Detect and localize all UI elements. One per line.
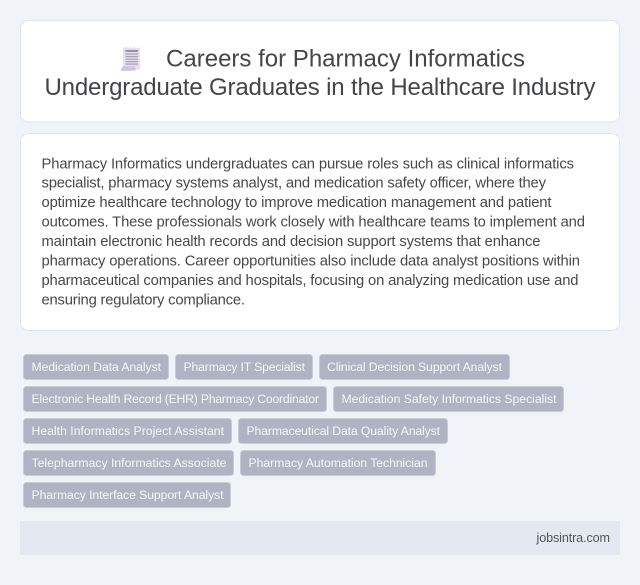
title (44, 46, 596, 101)
text block: summary paragraph: specialist, pharmacy systems analyst, and medication safety officer, where they (42, 176, 547, 192)
tag: Pharmacy Interface Support Analyst (24, 482, 230, 508)
tag: Pharmacy Automation Technician: Pharmacy Automation Technician (248, 456, 428, 470)
footer text: source: jobsintra.com (536, 531, 610, 545)
panel: header (20, 20, 620, 122)
text block: summary paragraph: pharmacy operations. Career opportunities also include data analyst positions within (42, 254, 580, 270)
tag: Clinical Decision Support Analyst (320, 354, 510, 380)
tag: Clinical Decision Support Analyst: Clinical Decision Support Analyst (327, 360, 503, 374)
text block: summary paragraph: pharmaceutical companies and hospitals, focusing on analyzing medication use and (42, 273, 578, 289)
text block: summary paragraph (42, 156, 585, 308)
text block: summary paragraph: Pharmacy Informatics undergraduates can pursue roles such as clinical informatics (42, 156, 574, 172)
tag: Electronic Health Record (EHR) Pharmacy Coordinator: Electronic Health Record (EHR) Pharmacy Coordinator (32, 392, 319, 406)
text block: summary paragraph: maintain electronic health records and decision support systems that enhance (42, 234, 540, 250)
text block: summary paragraph: outcomes. These professionals work closely with healthcare teams to implement and (42, 214, 585, 230)
tag: Pharmaceutical Data Quality Analyst (238, 418, 448, 444)
tag: Telepharmacy Informatics Associate: Telepharmacy Informatics Associate (32, 456, 227, 470)
tag: Medication Safety Informatics Specialist: Medication Safety Informatics Specialist (342, 392, 557, 406)
tag: Electronic Health Record (EHR) Pharmacy Coordinator (24, 386, 326, 412)
title: Undergraduate Graduates in the Healthcare Industry (44, 74, 596, 101)
tag: Pharmacy Automation Technician (240, 450, 436, 476)
tag: Pharmacy Interface Support Analyst: Pharmacy Interface Support Analyst (32, 488, 224, 502)
tag list: career roles (24, 354, 564, 508)
tag: Medication Data Analyst: Medication Data Analyst (32, 360, 162, 374)
tag: Health Informatics Project Assistant: Health Informatics Project Assistant (32, 424, 225, 438)
text block: summary paragraph: ensuring regulatory compliance. (42, 292, 245, 308)
text block: summary paragraph: optimize healthcare technology to improve medication management and patient (42, 195, 552, 211)
icon: scroll document (120, 47, 140, 71)
footer bar (20, 521, 620, 555)
tag: Health Informatics Project Assistant (24, 418, 232, 444)
tag: Telepharmacy Informatics Associate (24, 450, 234, 476)
tag: Medication Safety Informatics Specialist (334, 386, 564, 412)
tag: Pharmacy IT Specialist (176, 354, 312, 380)
tag: Pharmaceutical Data Quality Analyst: Pharmaceutical Data Quality Analyst (246, 424, 441, 438)
title: Careers for Pharmacy Informatics (166, 46, 525, 72)
tag: Pharmacy IT Specialist: Pharmacy IT Specialist (184, 360, 306, 374)
tag: Medication Data Analyst (24, 354, 168, 380)
panel: summary (20, 134, 620, 330)
